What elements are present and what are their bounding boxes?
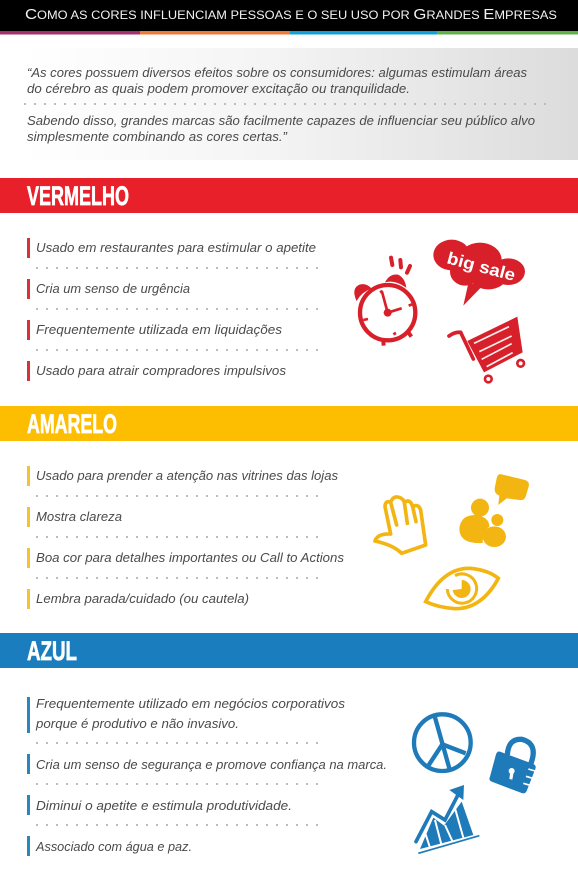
- icon: alarm clock: [355, 258, 415, 346]
- panel: azul list: [27, 697, 387, 856]
- title: COMO AS CORES INFLUENCIAM PESSOAS E O SEU USO POR GRANDES EMPRESAS: [25, 6, 557, 23]
- panel: vermelho list: Cria um senso de urgência: [36, 282, 190, 296]
- heading: azul: [0, 633, 578, 668]
- icon: padlock: [489, 739, 536, 793]
- panel: azul list: Diminui o apetite e estimula produtividade.: [36, 799, 292, 813]
- panel: azul list: Associado com água e paz.: [35, 840, 192, 854]
- icon: big sale speech bubble: [433, 240, 525, 306]
- panel: vermelho list: Usado para atrair compradores impulsivos: [36, 364, 286, 378]
- panel: amarelo list: Mostra clareza: [36, 510, 122, 524]
- icon: eye: [426, 568, 498, 609]
- icon: people with speech bubble: [459, 474, 529, 547]
- heading: amarelo: [0, 406, 578, 441]
- panel: amarelo list: Lembra parada/cuidado (ou cautela): [36, 592, 249, 606]
- panel: amarelo list: Usado para prender a atenção nas vitrines das lojas: [36, 469, 338, 483]
- panel: amarelo list: Boa cor para detalhes importantes ou Call to Actions: [36, 551, 344, 565]
- heading: amarelo: AMARELO: [27, 409, 117, 439]
- panel: amarelo list: [27, 466, 344, 609]
- heading: vermelho: [0, 178, 578, 213]
- panel: vermelho list: Frequentemente utilizada em liquidações: [36, 323, 282, 337]
- panel: intro quote: do cérebro as quais podem promover excitação ou tranquilidade.: [27, 82, 410, 96]
- panel: intro quote: Sabendo disso, grandes marcas são facilmente capazes de influenciar seu público alvo: [27, 114, 535, 128]
- icon: big sale speech bubble: big sale: [445, 249, 517, 285]
- panel: azul list: porque é produtivo e não invasivo.: [35, 717, 239, 731]
- panel: vermelho list: [27, 238, 324, 381]
- panel: intro quote: “As cores possuem diversos efeitos sobre os consumidores: algumas estimulam áreas: [27, 66, 527, 80]
- header bar: [0, 0, 578, 34]
- panel: vermelho list: Usado em restaurantes para estimular o apetite: [36, 241, 316, 255]
- panel: azul list: Frequentemente utilizado em negócios corporativos: [36, 697, 345, 711]
- panel: intro quote: [22, 48, 578, 160]
- panel: azul list: Cria um senso de segurança e promove confiança na marca.: [36, 758, 387, 772]
- panel: intro quote: simplesmente combinando as cores certas.”: [27, 130, 288, 144]
- heading: azul: AZUL: [27, 636, 77, 666]
- icon: rising chart: [416, 785, 479, 853]
- icon: peace sign: [414, 714, 471, 771]
- icon: hand: [375, 497, 426, 553]
- icon: shopping cart: [449, 317, 524, 382]
- heading: vermelho: VERMELHO: [27, 181, 129, 211]
